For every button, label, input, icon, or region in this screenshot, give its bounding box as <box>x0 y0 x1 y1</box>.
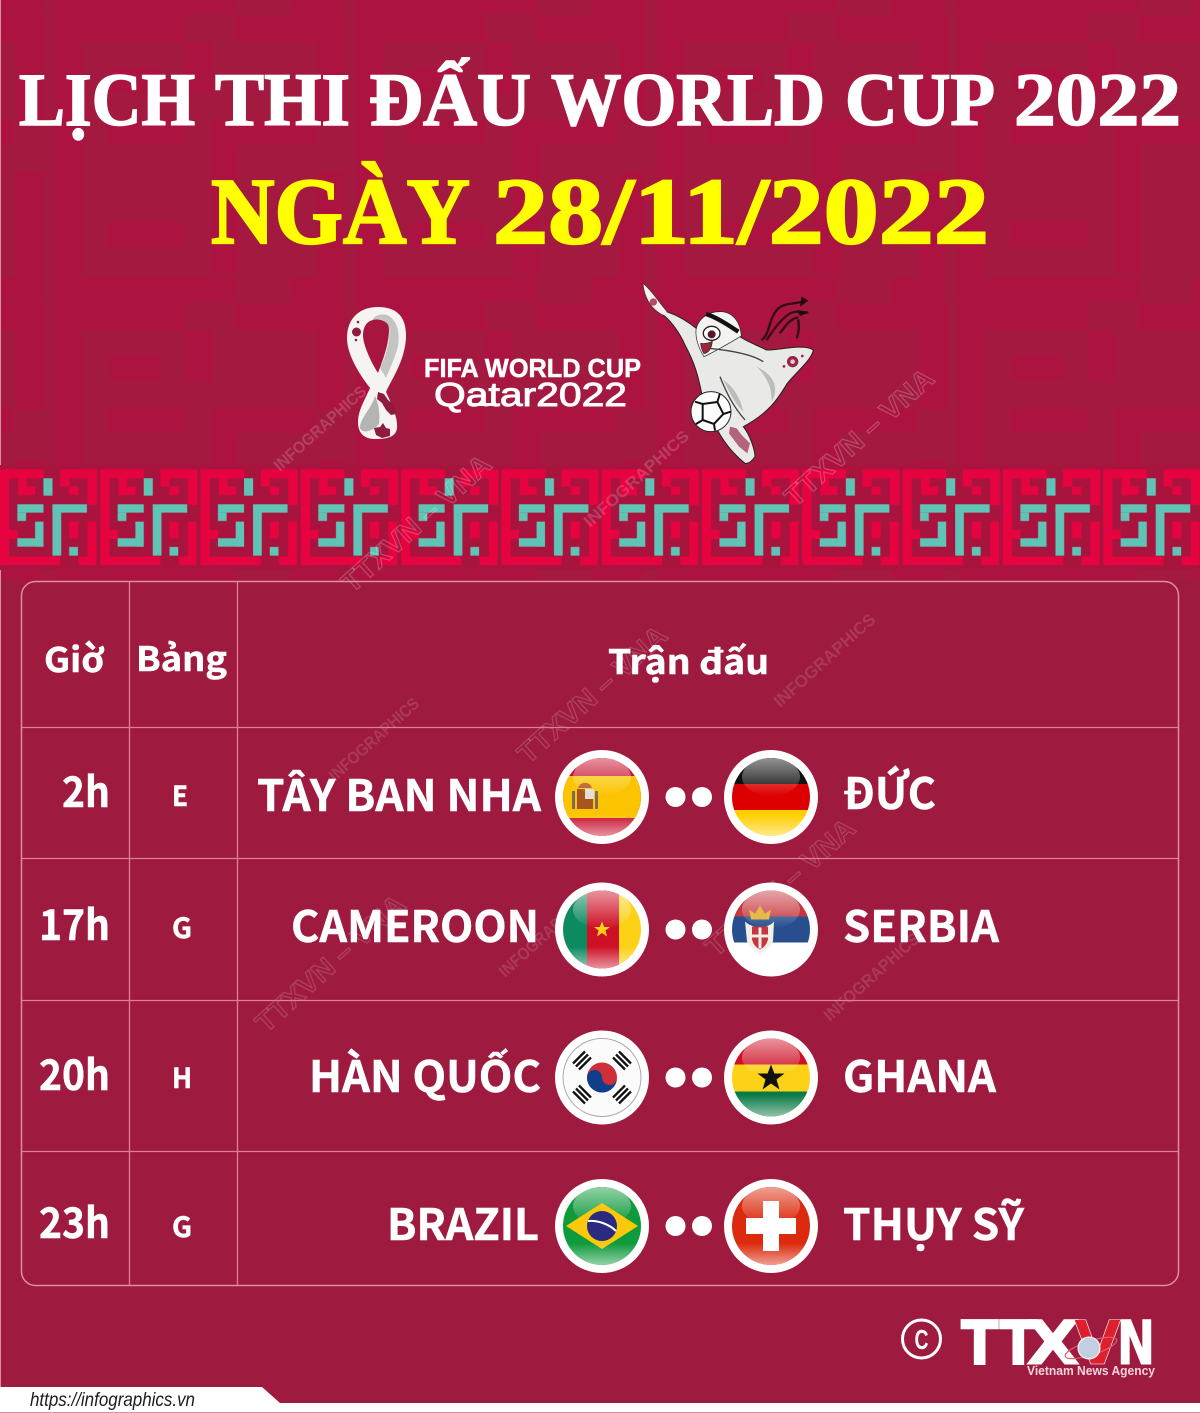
watermarks <box>249 362 940 1038</box>
row 4: Brazil vs Switzerland: BRAZIL <box>387 1191 539 1253</box>
title: LỊCH <box>19 59 195 142</box>
row 4: Brazil vs Switzerland: G <box>172 1206 192 1246</box>
panel: match schedule table <box>22 582 1178 1286</box>
row 1: Spain vs Germany <box>62 750 936 844</box>
icon: copyright <box>902 1320 940 1358</box>
watermarks: INFOGRAPHICS <box>820 929 923 1025</box>
footer bar <box>0 1387 1200 1413</box>
agency wordmark: TT <box>961 1308 1037 1379</box>
watermarks: TTXVN – VNA <box>249 888 411 1038</box>
icon: match dots <box>666 1068 712 1088</box>
logo subtitle: Qatar2022 <box>434 376 627 413</box>
decorative border band <box>0 465 1200 570</box>
agency wordmark: V <box>1074 1308 1121 1379</box>
icon: flag of Serbia <box>724 882 818 976</box>
icon: flag of Brazil <box>555 1179 649 1273</box>
header: match: Trận đấu <box>608 635 769 684</box>
watermarks: INFOGRAPHICS <box>495 890 593 981</box>
row 2: Cameroon vs Serbia <box>39 882 999 976</box>
agency caption: Vietnam News Agency <box>1027 1363 1156 1378</box>
date heading <box>211 160 989 264</box>
logo: FIFA World Cup Qatar 2022 <box>347 307 641 439</box>
row 3: South Korea vs Ghana: H <box>172 1057 192 1097</box>
icon: flag of Switzerland <box>724 1179 818 1273</box>
watermarks: INFOGRAPHICS <box>770 610 879 711</box>
watermarks: TTXVN – VNA <box>511 619 673 769</box>
row 1: Spain vs Germany: E <box>172 775 188 815</box>
agency wordmark <box>961 1308 1155 1379</box>
title: WORLD <box>551 59 825 142</box>
title <box>19 59 1181 142</box>
logo: TTXVN Vietnam News Agency <box>902 1308 1156 1379</box>
row 4: Brazil vs Switzerland: 23h <box>39 1190 110 1251</box>
row 1: Spain vs Germany: ĐỨC <box>843 760 936 822</box>
icon: copyright: C <box>914 1324 928 1355</box>
watermarks: INFOGRAPHICS <box>325 694 423 785</box>
icon: La'eeb mascot <box>643 284 813 463</box>
watermarks: TTXVN – VNA <box>699 812 861 962</box>
row 2: Cameroon vs Serbia: G <box>172 907 192 947</box>
icon: flag of Germany <box>724 750 818 844</box>
watermarks: TTXVN – VNA <box>778 362 940 512</box>
row 4: Brazil vs Switzerland <box>39 1179 1025 1273</box>
logo text: FIFA WORLD CUP <box>424 353 641 383</box>
icon: flag of Spain <box>555 750 649 844</box>
title: THI <box>215 59 350 142</box>
row 3: South Korea vs Ghana: 20h <box>39 1042 110 1103</box>
icon: emblem <box>347 307 406 439</box>
watermarks: TTXVN – VNA <box>335 448 497 598</box>
agency wordmark: N <box>1117 1308 1155 1379</box>
row 3: South Korea vs Ghana <box>39 1030 996 1124</box>
title: ĐẤU <box>369 59 531 142</box>
row 2: Cameroon vs Serbia: SERBIA <box>843 893 999 955</box>
row 3: South Korea vs Ghana: GHANA <box>843 1043 996 1105</box>
row 2: Cameroon vs Serbia: CAMEROON <box>291 893 539 955</box>
footer url: https://infographics.vn <box>30 1390 195 1411</box>
watermarks: INFOGRAPHICS <box>580 427 693 531</box>
row 3: South Korea vs Ghana: HÀN QUỐC <box>309 1043 541 1105</box>
icon: match dots <box>666 787 712 807</box>
date heading: NGÀY <box>211 160 470 264</box>
row 1: Spain vs Germany: 2h <box>62 759 110 820</box>
watermarks: INFOGRAPHICS <box>270 382 370 475</box>
title: CUP <box>845 59 995 142</box>
row 2: Cameroon vs Serbia: 17h <box>39 892 110 953</box>
icon: flag of Cameroon <box>555 882 649 976</box>
icon: flag of South Korea <box>555 1030 649 1124</box>
icon: flag of Ghana <box>724 1030 818 1124</box>
header: hour: Giờ <box>44 633 105 682</box>
date heading: 28/11/2022 <box>493 160 989 264</box>
title: 2022 <box>1014 59 1181 142</box>
row 1: Spain vs Germany: TÂY BAN NHA <box>257 762 541 824</box>
row 4: Brazil vs Switzerland: THỤY SỸ <box>843 1191 1025 1253</box>
agency wordmark: X <box>1026 1308 1080 1379</box>
icon: match dots <box>666 1216 712 1236</box>
icon: match dots <box>666 920 712 940</box>
header: group: Bảng <box>136 632 227 681</box>
